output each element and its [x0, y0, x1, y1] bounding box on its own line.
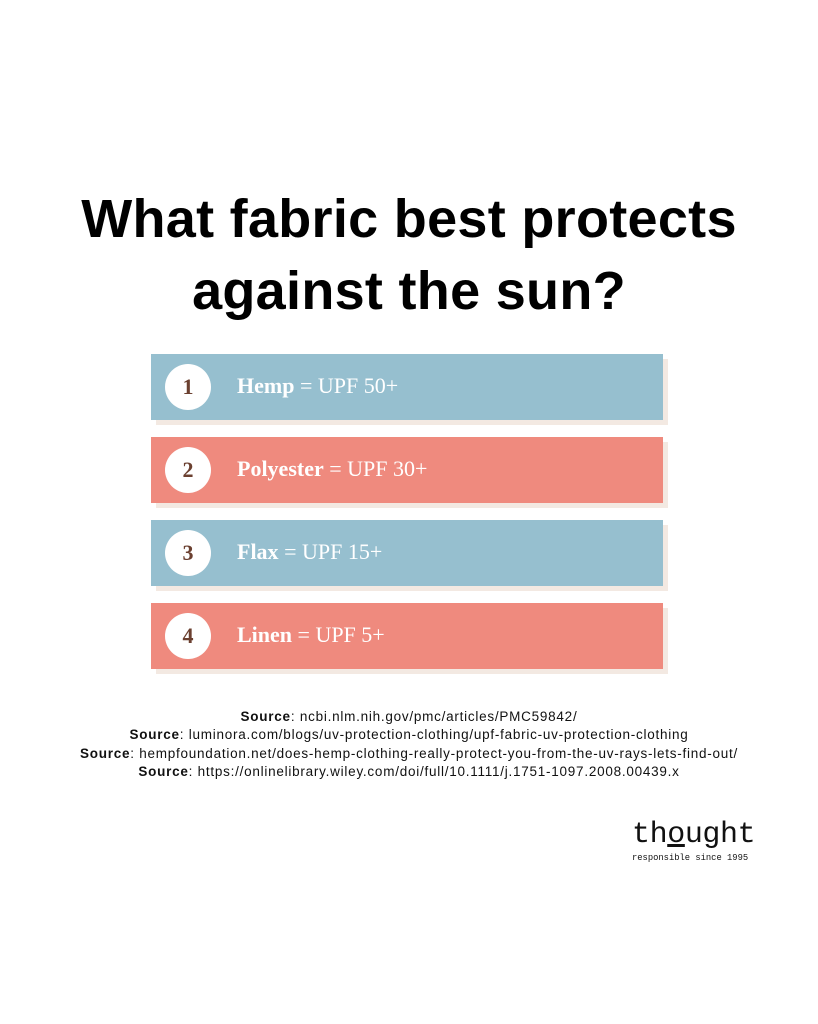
sources: Source: ncbi.nlm.nih.gov/pmc/articles/PMC59842/ [241, 709, 577, 724]
bar: flax: 3 [182, 540, 194, 565]
sources: Source: https://onlinelibrary.wiley.com/doi/full/10.1111/j.1751-1097.2008.00439.x [138, 764, 680, 779]
sources: Source: hempfoundation.net/does-hemp-clothing-really-protect-you-from-the-uv-rays-lets-find-out/ [80, 746, 738, 761]
title [81, 189, 737, 321]
title: against the sun? [192, 261, 626, 321]
bar: linen: Linen = UPF 5+ [237, 622, 385, 647]
bar: linen [151, 603, 663, 669]
logo: responsible since 1995 [632, 853, 748, 863]
bar: polyester: Polyester = UPF 30+ [237, 456, 427, 481]
sources [80, 709, 738, 779]
bar: polyester: 2 [182, 457, 194, 482]
bar: linen: 4 [182, 623, 194, 648]
bar: polyester [151, 437, 663, 503]
bar: flax [151, 520, 663, 586]
bar: hemp [151, 354, 663, 420]
bar: flax: Flax = UPF 15+ [237, 539, 382, 564]
bar: hemp: 1 [182, 374, 194, 399]
sources: Source: luminora.com/blogs/uv-protection-clothing/upf-fabric-uv-protection-clothing [130, 727, 688, 742]
logo: thought [632, 818, 755, 852]
bar: hemp: Hemp = UPF 50+ [237, 373, 398, 398]
title: What fabric best protects [81, 189, 737, 249]
